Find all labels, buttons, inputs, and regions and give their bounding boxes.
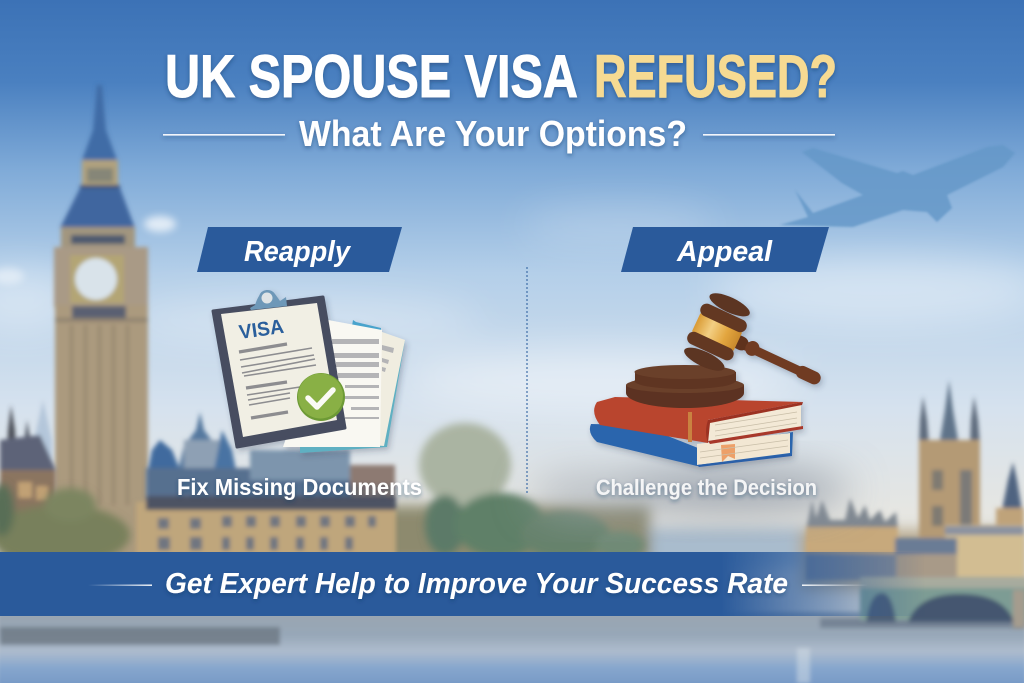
far skyline haze (0, 505, 1024, 590)
panel: appeal (590, 227, 836, 500)
background: left palace turrets (0, 400, 56, 520)
background: Westminster Bridge (860, 577, 1024, 628)
icon: visa clipboard with documents (213, 290, 405, 453)
label: Fix Missing Documents: Fix Missing Documents (177, 474, 422, 500)
background: Victoria Tower and Parliament (806, 380, 1024, 580)
heading: Reapply banner (197, 227, 402, 272)
heading: Reapply banner: Reapply (244, 236, 352, 268)
background: trees (0, 423, 645, 565)
background: airplane silhouette (780, 145, 1015, 227)
title: UK SPOUSE VISA (165, 43, 578, 110)
column divider (526, 267, 528, 495)
icon: visa clipboard with documents: VISA (238, 316, 285, 344)
heading: Appeal banner: Appeal (676, 236, 773, 268)
heading: Appeal banner (621, 227, 829, 272)
icon: gavel on books (590, 287, 836, 467)
background: central building (136, 412, 396, 557)
background: fog bank (530, 466, 850, 517)
panel: reapply (177, 227, 422, 500)
title: REFUSED? (594, 43, 837, 110)
label: Challenge the Decision: Challenge the Decision (596, 475, 817, 500)
subtitle with rules: What Are Your Options? (299, 113, 687, 154)
background: River Thames (0, 612, 1024, 683)
background: Big Ben clock tower (54, 85, 148, 555)
footer banner (0, 552, 925, 616)
footer banner: Get Expert Help to Improve Your Success Rate (165, 568, 788, 600)
